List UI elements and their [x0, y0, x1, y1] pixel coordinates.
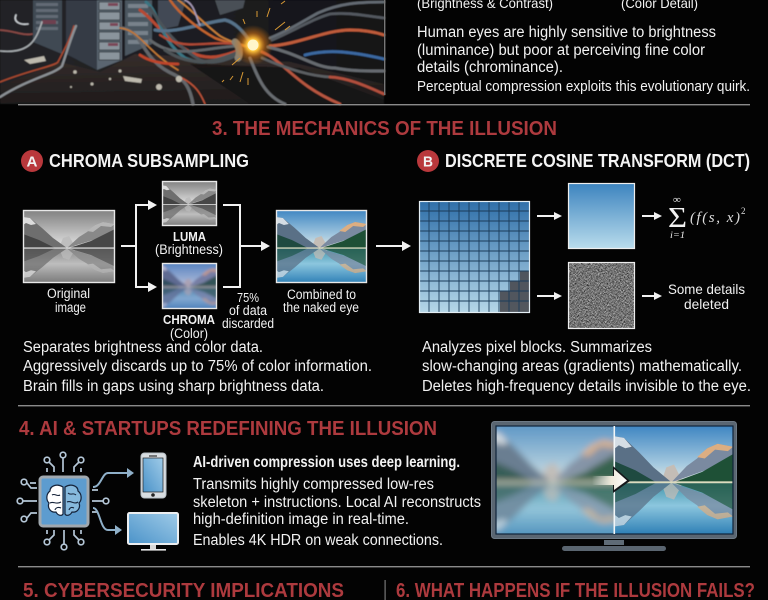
chroma description — [23, 339, 372, 395]
split arrows — [121, 200, 157, 292]
left blurred half — [496, 426, 614, 534]
tv stand — [562, 540, 666, 551]
formula: (f(s, x) — [690, 210, 740, 226]
DCT description — [422, 339, 751, 395]
DCT description: Analyzes pixel blocks. Summarizes — [422, 339, 652, 356]
luma label: (Brightness) — [155, 242, 223, 257]
original image label — [47, 286, 90, 315]
formula: ∞ — [673, 194, 681, 206]
right sharp half — [615, 426, 732, 534]
subheading A: CHROMA SUBSAMPLING — [49, 151, 249, 171]
text block: AI compression: AI-driven compression uses deep learning. — [193, 454, 460, 471]
heading: section 3: 3. THE MECHANICS OF THE ILLUSION — [212, 117, 557, 140]
discard label: 75% — [237, 291, 259, 305]
deleted label: Some details — [668, 281, 745, 297]
text block: perception explanation: (luminance) but poor at perceiving fine color — [417, 42, 705, 59]
phone — [141, 453, 166, 498]
badge A: A — [26, 154, 38, 170]
text block: AI compression — [193, 454, 481, 549]
icon: AI chip sending to devices — [17, 452, 178, 551]
arrows to results — [642, 212, 662, 300]
discard label — [222, 291, 274, 331]
text block: AI compression: Transmits highly compressed low-res — [193, 476, 434, 493]
panel: chroma subsampling — [21, 150, 372, 395]
chip — [40, 477, 88, 526]
DCT description: slow-changing areas (gradients) mathematically. — [422, 358, 742, 375]
TV: blurred to sharp reconstruction — [490, 420, 736, 551]
pixel block grid — [419, 201, 530, 313]
DCT description: Deletes high-frequency details invisible to the eye. — [422, 378, 751, 395]
badge B — [417, 150, 439, 172]
chroma description: Separates brightness and color data. — [23, 339, 263, 356]
discard label: discarded — [222, 316, 274, 331]
combined label: the naked eye — [283, 300, 359, 315]
brain — [47, 485, 81, 515]
formula: i=1 — [670, 230, 685, 240]
chroma label: (Color) — [170, 326, 208, 341]
deleted label: deleted — [684, 296, 729, 312]
luma image — [162, 181, 217, 226]
luma label — [155, 229, 223, 257]
arrows from grid — [537, 212, 562, 300]
text block: perception explanation: details (chrominance). — [417, 59, 563, 76]
formula: Σ — [668, 203, 687, 234]
gradient block — [568, 184, 634, 248]
combined label: Combined to — [287, 287, 356, 302]
chroma label — [163, 312, 216, 341]
tangled cables — [0, 0, 384, 104]
noise block — [568, 262, 635, 329]
vertical panel rule — [384, 0, 385, 95]
spark — [222, 1, 290, 85]
transition arrow — [592, 466, 630, 493]
formula: 2 — [741, 206, 746, 216]
monitor — [128, 513, 178, 551]
text block: perception explanation: Perceptual compression exploits this evolutionary quirk. — [417, 79, 750, 95]
tv frame — [492, 422, 736, 538]
chroma image — [159, 260, 220, 312]
debris — [24, 56, 182, 90]
combined label — [283, 287, 359, 315]
text block: perception explanation — [417, 0, 750, 95]
badge B: B — [423, 154, 433, 170]
text block: perception explanation: Human eyes are highly sensitive to brightness — [417, 24, 716, 41]
arrow: A to B — [376, 241, 411, 251]
heading: section 4: 4. AI & STARTUPS REDEFINING THE ILLUSION — [19, 417, 437, 440]
merge arrow — [223, 205, 270, 287]
text block: AI compression: Enables 4K HDR on weak connections. — [193, 532, 443, 549]
discard label: of data — [229, 303, 267, 318]
chroma description: Brain fills in gaps using sharp brightness data. — [23, 378, 324, 395]
original image label: Original — [47, 286, 90, 301]
chip pins — [17, 452, 109, 550]
formula — [668, 194, 746, 240]
badge A — [21, 150, 43, 172]
original grayscale image — [23, 210, 115, 283]
panel: discrete cosine transform — [417, 150, 751, 395]
data arrows — [93, 473, 128, 530]
text block: AI compression: high-definition image in real-time. — [193, 511, 409, 528]
chroma label: CHROMA — [163, 312, 216, 327]
deleted label — [668, 281, 745, 312]
luma label: LUMA — [173, 229, 207, 244]
original image label: image — [55, 300, 86, 315]
server racks — [33, 0, 245, 70]
combined image — [276, 210, 367, 283]
chroma description: Aggressively discards up to 75% of color information. — [23, 358, 372, 375]
illustration: frayed cables sparking beside server racks — [0, 0, 384, 104]
text block: AI compression: skeleton + instructions. Local AI reconstructs — [193, 494, 481, 511]
